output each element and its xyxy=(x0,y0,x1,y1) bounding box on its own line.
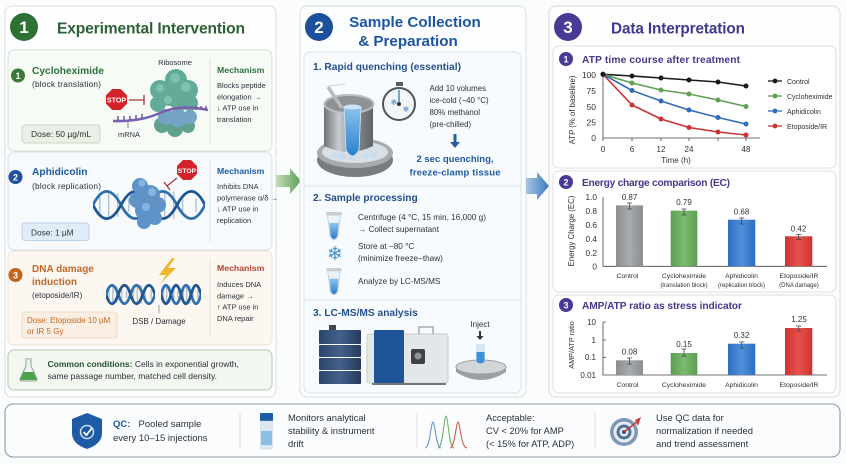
processing steps: (minimize freeze−thaw) xyxy=(358,254,443,263)
badge: 1 xyxy=(563,54,569,64)
bar chart: energy charge: Control xyxy=(617,273,639,280)
QC text: Pooled sample xyxy=(138,419,201,430)
icon: target xyxy=(610,417,641,446)
badge: 2 xyxy=(563,178,569,188)
card: DNA damage xyxy=(8,251,272,345)
stability text: Monitors analytical xyxy=(288,412,366,423)
card: ATP time course xyxy=(553,46,836,168)
common conditions text xyxy=(48,359,239,381)
line chart: ATP: 25 xyxy=(587,118,596,128)
icon: stopwatch xyxy=(383,82,415,120)
callout: common conditions xyxy=(8,350,272,390)
stability text xyxy=(288,412,375,449)
series: aphidicolin xyxy=(603,74,748,126)
bar chart: energy charge: Energy Charge (EC) xyxy=(567,195,576,266)
panel: data interpretation xyxy=(549,6,840,397)
label: inject: Inject xyxy=(470,320,490,329)
arrow: down xyxy=(450,134,460,148)
arrow: step 2 to step 3 xyxy=(526,172,549,200)
card title xyxy=(32,167,101,191)
bar chart: AMP/ATP: Cycloheximide xyxy=(662,382,706,389)
normalization text: normalization if needed xyxy=(656,425,753,436)
processing steps: → Collect supernatant xyxy=(358,225,440,234)
icon: stopwatch: ❄ xyxy=(391,98,397,107)
mechanism: Blocks peptide xyxy=(217,81,266,90)
section: LC-MS/MS analysis: 3. LC-MS/MS analysis xyxy=(313,308,418,319)
mechanism: polymerase α/δ → xyxy=(217,194,278,202)
illustration: ribosome on mRNA xyxy=(106,58,208,139)
mechanism: ↑ ATP use in xyxy=(217,302,258,312)
bar chart: energy charge: 0 xyxy=(592,262,597,272)
badge: step 3: 3 xyxy=(563,18,573,37)
dose xyxy=(22,312,117,338)
mechanism: elongation → xyxy=(217,92,261,102)
section: rapid quenching: 1. Rapid quenching (essential) xyxy=(313,62,461,73)
chart title: Energy charge comparison (EC) xyxy=(582,178,730,189)
card: AMP/ATP ratio xyxy=(553,295,836,393)
quench result xyxy=(410,154,500,178)
badge xyxy=(559,52,573,66)
card: cycloheximide xyxy=(8,50,272,151)
badge: step 2: 2 xyxy=(314,18,324,37)
panel: sample collection xyxy=(300,6,526,397)
icon: stopwatch: ❄ xyxy=(403,105,409,114)
line chart: ATP: 75 xyxy=(587,86,596,96)
bar chart: AMP/ATP: 1 xyxy=(592,336,597,345)
mechanism: Mechanism xyxy=(217,65,265,75)
stability text: drift xyxy=(288,438,304,449)
icon: analysis tube xyxy=(326,268,342,295)
section: rapid quenching xyxy=(313,62,500,178)
line chart: ATP: 0 xyxy=(591,133,596,143)
line chart: ATP: 100 xyxy=(582,70,596,80)
common conditions text: Common conditions: Cells in exponential growth, xyxy=(48,359,239,369)
mechanism: Mechanism xyxy=(217,263,265,273)
dose xyxy=(22,125,100,143)
bar chart: AMP/ATP: 0.01 xyxy=(580,371,597,380)
acceptance text: (< 15% for ATP, ADP) xyxy=(486,439,574,449)
line chart: ATP: 12 xyxy=(657,145,666,154)
dose: or IR 5 Gy xyxy=(27,327,63,336)
card: energy charge xyxy=(553,171,836,292)
card title: (block replication) xyxy=(32,181,101,191)
label: inject xyxy=(470,320,490,340)
panel: QC bar xyxy=(5,404,840,457)
icon: snowflake: ❄ xyxy=(327,244,343,265)
bar chart: AMP/ATP: Aphidicolin xyxy=(725,382,758,389)
bar chart: energy charge xyxy=(567,192,827,289)
line chart: ATP xyxy=(568,70,760,165)
heading: sample collection: Sample Collection xyxy=(349,14,481,31)
badge: card 3 xyxy=(8,268,22,282)
heading: sample collection: & Preparation xyxy=(358,33,458,50)
chart title: ATP time course after treatment xyxy=(582,55,741,66)
bar chart: AMP/ATP: AMP/ATP ratio xyxy=(567,321,576,369)
badge: step 1 xyxy=(10,13,38,41)
normalization text xyxy=(656,412,753,449)
bar chart: energy charge: Aphidicolin xyxy=(725,273,758,280)
badge: 3 xyxy=(563,300,569,310)
card title: Aphidicolin xyxy=(32,167,87,178)
bar chart: AMP/ATP: 0.15 xyxy=(676,340,692,349)
icon: flask xyxy=(20,359,37,381)
bar chart: energy charge: Etoposide/IR xyxy=(780,273,819,280)
bar chart: energy charge: (replication block) xyxy=(718,283,765,289)
mechanism: Induces DNA xyxy=(217,280,261,289)
quench instructions: 80% methanol xyxy=(430,108,480,117)
icon: chromatogram peaks xyxy=(425,416,467,448)
processing steps xyxy=(358,213,486,286)
illustration: polymerase on DNA xyxy=(93,160,205,229)
mechanism: ↓ ATP use in xyxy=(217,104,258,112)
acceptance text: Acceptable: xyxy=(486,413,535,423)
bar chart: energy charge: 0.79 xyxy=(676,198,692,207)
line chart: ATP: 6 xyxy=(630,145,635,154)
bar chart: energy charge: (DNA damage) xyxy=(779,283,819,289)
QC text: QC: xyxy=(113,419,130,430)
bar chart: AMP/ATP xyxy=(567,315,827,389)
card title: Cycloheximide xyxy=(32,66,104,77)
mechanism xyxy=(217,166,278,225)
legend: Aphidicolin xyxy=(787,109,821,116)
card: aphidicolin xyxy=(8,152,278,250)
line chart: ATP: 24 xyxy=(685,145,694,154)
illustration: DNA double strand break xyxy=(106,258,201,326)
bar chart: energy charge: (translation block) xyxy=(660,283,708,289)
icon: QC vial xyxy=(260,413,273,449)
mechanism: DNA repair xyxy=(217,314,254,323)
processing steps: Store at −80 °C xyxy=(358,242,414,251)
mechanism: Mechanism xyxy=(217,166,265,176)
bar chart: AMP/ATP: 0.08 xyxy=(622,348,638,356)
illustration: mass spectrometer xyxy=(367,327,448,385)
acceptance text: CV < 20% for AMP xyxy=(486,426,564,436)
mechanism xyxy=(217,65,266,124)
section: LC-MS/MS analysis xyxy=(313,308,506,385)
badge: card 1: 1 xyxy=(15,71,21,81)
bar chart: energy charge: 0.2 xyxy=(585,248,597,258)
mechanism: translation xyxy=(217,115,252,124)
dose: Dose: 50 µg/mL xyxy=(31,129,91,139)
card title xyxy=(32,66,104,89)
badge: step 2 xyxy=(305,13,333,41)
QC text xyxy=(113,419,208,444)
illustration: autosampler vial xyxy=(456,344,506,380)
legend: Control xyxy=(787,79,810,86)
line chart: ATP: Time (h) xyxy=(661,156,691,165)
badge: step 3 xyxy=(554,13,582,41)
illustration: cold bucket with tube xyxy=(317,84,393,177)
series: etoposide xyxy=(603,74,748,138)
processing steps: Centrifuge (4 °C, 15 min, 16,000 g) xyxy=(358,213,486,222)
mechanism: damage → xyxy=(217,292,254,300)
legend: Etoposide/IR xyxy=(787,124,827,131)
bar chart: energy charge: 0.42 xyxy=(791,224,807,234)
heading: sample collection xyxy=(349,14,481,50)
series: control xyxy=(600,72,748,88)
badge: card 1 xyxy=(11,68,25,82)
mechanism: Inhibits DNA xyxy=(217,182,259,191)
bar chart: energy charge: 0.6 xyxy=(585,220,597,230)
mechanism xyxy=(217,263,265,323)
badge xyxy=(559,175,573,189)
card title: induction xyxy=(32,277,77,288)
dose xyxy=(22,223,89,240)
normalization text: Use QC data for xyxy=(656,412,724,423)
section: sample processing: 2. Sample processing xyxy=(313,193,418,204)
icon: centrifuge tube xyxy=(326,212,342,240)
quench instructions: (pre-chilled) xyxy=(430,120,472,129)
card title: (block translation) xyxy=(32,79,101,89)
dose: Dose: 1 µM xyxy=(31,228,74,238)
card title: (etoposide/IR) xyxy=(32,291,83,300)
bar chart: AMP/ATP: 10 xyxy=(587,318,597,327)
bar chart: AMP/ATP: 0.32 xyxy=(734,331,750,340)
bar chart: energy charge: 0.4 xyxy=(585,234,597,244)
badge: card 2: 2 xyxy=(13,172,18,182)
badge: card 2 xyxy=(8,170,22,184)
illustration: DNA double strand break: DSB / Damage xyxy=(132,317,186,326)
badge: step 1: 1 xyxy=(19,18,29,37)
processing steps: Analyze by LC-MS/MS xyxy=(358,277,441,286)
line chart: ATP: 0 xyxy=(601,145,606,154)
line chart: ATP: 48 xyxy=(742,145,751,154)
mechanism: ↓ ATP use in xyxy=(217,204,258,214)
bar chart: AMP/ATP: 0.1 xyxy=(585,353,597,362)
quench result: freeze-clamp tissue xyxy=(410,168,500,178)
bar chart: energy charge: 0.68 xyxy=(734,208,750,216)
bar chart: energy charge: Cycloheximide xyxy=(662,273,706,280)
legend xyxy=(768,79,833,131)
acceptance text xyxy=(486,413,574,449)
arrow: step 1 to step 2 xyxy=(276,168,301,194)
dose: Dose: Etoposide 10 µM xyxy=(27,316,111,325)
badge: card 3: 3 xyxy=(13,270,18,280)
QC text: every 10–15 injections xyxy=(113,433,208,444)
series: cycloheximide xyxy=(603,74,748,109)
chart title: AMP/ATP ratio as stress indicator xyxy=(582,301,742,312)
panel: experimental intervention xyxy=(5,6,278,397)
mechanism: replication xyxy=(217,216,251,225)
line chart: ATP: ATP (% of baseline) xyxy=(568,75,577,144)
line chart: ATP: 50 xyxy=(587,102,596,112)
icon: shield xyxy=(72,413,102,449)
heading: experimental intervention: Experimental Intervention xyxy=(57,20,245,38)
quench result: 2 sec quenching, xyxy=(416,154,494,165)
bar chart: energy charge: 0.8 xyxy=(585,206,597,216)
card title: DNA damage xyxy=(32,264,94,275)
card title xyxy=(32,264,94,300)
illustration: LC stack xyxy=(319,325,361,384)
badge xyxy=(559,298,573,312)
illustration: ribosome on mRNA: Ribosome xyxy=(158,58,192,67)
quench instructions xyxy=(430,84,489,129)
heading: data interpretation: Data Interpretation xyxy=(611,20,745,38)
section: sample processing xyxy=(313,193,486,295)
quench instructions: ice-cold (−40 °C) xyxy=(430,96,489,105)
bar chart: energy charge: 0.87 xyxy=(622,193,638,202)
bar chart: AMP/ATP: Etoposide/IR xyxy=(780,382,819,389)
illustration: ribosome on mRNA: mRNA xyxy=(118,130,140,139)
legend: Cycloheximide xyxy=(787,94,833,101)
stability text: stability & instrument xyxy=(288,425,375,436)
bar chart: energy charge: 1.0 xyxy=(585,192,597,202)
quench instructions: Add 10 volumes xyxy=(430,84,486,93)
normalization text: and trend assessment xyxy=(656,438,749,449)
common conditions text: same passage number, matched cell density. xyxy=(48,371,217,381)
bar chart: AMP/ATP: 1.25 xyxy=(791,315,807,324)
bar chart: AMP/ATP: Control xyxy=(617,382,639,389)
